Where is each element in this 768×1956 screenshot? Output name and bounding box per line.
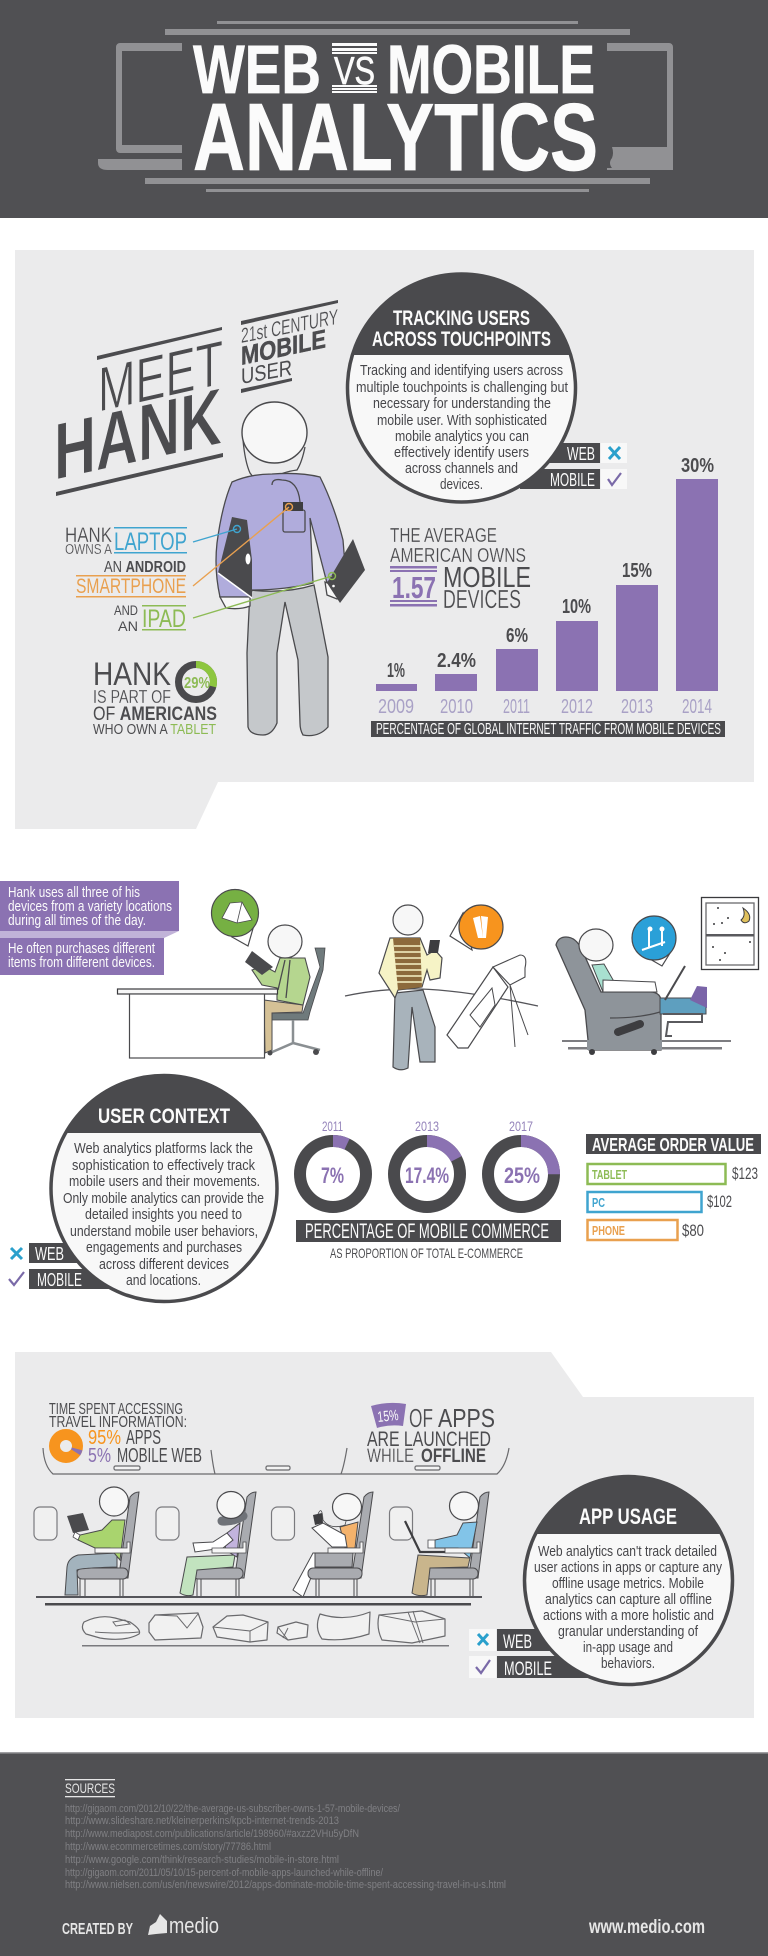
callout: app usage: in-app usage and	[583, 1639, 673, 1656]
icon: night window	[702, 898, 758, 970]
chart: 29% donut: 29%	[184, 675, 210, 692]
text: hank tablet statistic: WHO OWN A TABLET	[93, 721, 216, 738]
callout: tracking users across touchpoints: devices.	[440, 476, 483, 493]
panel: purple location notes	[0, 881, 179, 975]
text: 15% of apps launched offline	[367, 1403, 495, 1467]
text: an android smartphone: SMARTPHONE	[76, 575, 186, 598]
web and mobile tags: MOBILE	[550, 470, 595, 490]
bar chart: global internet traffic from mobile devices: 2011	[503, 696, 530, 718]
illustration: hank figure	[216, 402, 365, 736]
panel: purple location notes: during all times of the day.	[8, 912, 146, 929]
callout: user context: detailed insights you need to	[85, 1206, 242, 1223]
chart: average order value: PHONE	[592, 1223, 625, 1238]
text: average american owns 1.57 mobile devices	[390, 525, 531, 614]
text: hank tablet statistic: OF AMERICANS	[93, 704, 217, 725]
text: an android smartphone	[76, 559, 186, 598]
text: average american owns 1.57 mobile devices: THE AVERAGE	[390, 525, 497, 547]
icon: laptop outline behind title	[98, 43, 673, 170]
callout: user context: understand mobile user behaviors,	[70, 1223, 258, 1240]
text: source urls: http://www.google.com/think/research-studies/mobile-in-store.html	[65, 1854, 339, 1866]
icon: medio logo	[148, 1914, 167, 1935]
callout: app usage: Web analytics can't track detailed	[538, 1543, 717, 1560]
text: source urls: http://gigaom.com/2011/05/10/15-percent-of-mobile-apps-launched-while-offline/	[65, 1867, 384, 1879]
chart: average order value: PC	[592, 1195, 605, 1210]
text: time spent accessing travel information: 5%	[88, 1445, 111, 1467]
donut 2017: 2017	[509, 1118, 533, 1134]
text: hank tablet statistic: IS PART OF	[93, 687, 171, 707]
callout: app usage: analytics can capture all offline	[545, 1591, 712, 1608]
web and mobile tags	[520, 443, 627, 490]
airplane windows	[34, 1507, 412, 1540]
passenger 4	[405, 1492, 489, 1597]
callout: user context: and locations.	[126, 1272, 201, 1289]
text: 15% of apps launched offline: APPS	[438, 1403, 495, 1433]
callout: app usage	[524, 1475, 732, 1684]
heading: 21st century mobile user: USER	[241, 355, 292, 389]
callout: user context: sophistication to effectively track	[72, 1157, 255, 1174]
panel: purple location notes: items from different devices.	[8, 954, 155, 971]
luggage in hold	[82, 1611, 445, 1643]
text: hank owns a laptop: HANK	[65, 524, 112, 547]
callout: user context: mobile users and their movements.	[69, 1173, 260, 1190]
heading: meet hank	[54, 326, 223, 498]
chart: percentage of mobile commerce donuts: AS PROPORTION OF TOTAL E-COMMERCE	[330, 1245, 523, 1261]
callout: app usage: APP USAGE	[579, 1504, 677, 1529]
text: time spent accessing travel information: APPS	[126, 1427, 161, 1449]
title: WEB	[193, 31, 321, 108]
credit: created by medio: medio	[169, 1913, 219, 1938]
text: and an ipad: AN	[118, 618, 138, 634]
bar chart: global internet traffic from mobile devices: 1%	[387, 660, 405, 682]
callout: tracking users across touchpoints: ACROSS TOUCHPOINTS	[372, 328, 551, 351]
callout: tracking users across touchpoints: effectively identify users	[394, 444, 529, 461]
chart: average order value	[586, 1134, 761, 1240]
link text: www.medio.com: www.medio.com	[588, 1917, 705, 1938]
airplane ceiling	[43, 1448, 509, 1474]
panel: meet hank	[15, 250, 754, 829]
donut 2011: 7%	[321, 1163, 344, 1188]
text: 15% of apps launched offline: 15%	[377, 1407, 399, 1426]
callout: app usage: offline usage metrics. Mobile	[552, 1575, 704, 1592]
text: 15% of apps launched offline: WHILE	[367, 1446, 414, 1467]
title: MOBILE	[387, 31, 595, 108]
text: average american owns 1.57 mobile devices: DEVICES	[443, 584, 521, 614]
bar chart: global internet traffic from mobile devices	[371, 455, 725, 738]
text: time spent accessing travel information: TRAVEL INFORMATION:	[49, 1414, 187, 1431]
text: hank owns a laptop: LAPTOP	[114, 528, 187, 556]
header banner	[0, 0, 768, 218]
text: hank tablet statistic	[93, 656, 217, 738]
web and mobile tags: user context	[9, 1243, 119, 1290]
text: average american owns 1.57 mobile devices: AMERICAN OWNS	[390, 545, 526, 567]
credit: created by medio: CREATED BY	[62, 1921, 133, 1938]
donut 2013: 2013	[415, 1118, 439, 1134]
web and mobile tags: user context: WEB	[35, 1244, 64, 1264]
chart: 95% apps donut	[52, 1432, 80, 1460]
callout: user context: across different devices	[99, 1256, 229, 1273]
text: average american owns 1.57 mobile devices: 1.57	[392, 570, 436, 605]
text: time spent accessing travel information	[49, 1401, 202, 1467]
panel: app usage airplane	[15, 1352, 754, 1718]
text: hank tablet statistic: HANK	[93, 656, 171, 692]
text: source urls: http://www.mediapost.com/publications/article/198960/#axzz2VHu5yDfN	[65, 1828, 359, 1840]
web and mobile tags: WEB	[567, 444, 595, 464]
callout: tracking users across touchpoints: TRACKING USERS	[393, 307, 530, 330]
chart: average order value: $102	[707, 1192, 732, 1211]
text: time spent accessing travel information: 95%	[88, 1427, 121, 1449]
text: and an ipad	[114, 602, 186, 634]
heading: meet hank: MEET	[98, 326, 223, 426]
text: time spent accessing travel information: TIME SPENT ACCESSING	[49, 1401, 183, 1418]
heading: 21st century mobile user: MOBILE	[241, 323, 326, 371]
donut 2017	[488, 1118, 554, 1207]
illustration: hank in recliner	[556, 898, 758, 1055]
bar chart: global internet traffic from mobile devices: 10%	[562, 596, 591, 618]
text: and an ipad: AND	[114, 602, 138, 618]
chart: percentage of mobile commerce donuts: PERCENTAGE OF MOBILE COMMERCE	[305, 1220, 549, 1243]
text: 15% of apps launched offline: OF	[409, 1403, 433, 1433]
chart: average order value: TABLET	[592, 1167, 627, 1182]
donut 2011: 2011	[322, 1118, 343, 1134]
text: source urls: http://www.nielsen.com/us/en/newswire/2012/apps-dominate-mobile-time-spent-accessing-travel-in-u-s.html	[65, 1879, 506, 1891]
donut 2011	[300, 1118, 366, 1207]
chart: average order value: $80	[682, 1221, 704, 1240]
passenger 3	[293, 1492, 373, 1597]
bar chart: global internet traffic from mobile devices: 2.4%	[437, 650, 476, 672]
bar chart: global internet traffic from mobile devices: 2009	[378, 696, 414, 718]
text: time spent accessing travel information: MOBILE WEB	[117, 1445, 202, 1467]
footer	[0, 1752, 768, 1956]
callout lines	[193, 504, 336, 618]
callout: user context: engagements and purchases	[86, 1239, 242, 1256]
title	[193, 31, 598, 191]
heading: meet hank: HANK	[54, 372, 222, 498]
web and mobile tags: app usage	[469, 1629, 592, 1680]
bar chart: global internet traffic from mobile devices: 6%	[506, 625, 528, 647]
callout: tracking users across touchpoints: necessary for understanding the	[373, 395, 551, 412]
web and mobile tags: app usage: MOBILE	[504, 1659, 552, 1680]
panel: purple location notes: He often purchases different	[8, 940, 156, 957]
passenger 1	[65, 1487, 139, 1597]
illustration: hank at desk	[118, 890, 325, 1058]
text: 15% of apps launched offline: ARE LAUNCHED	[367, 1428, 491, 1451]
text: source urls: http://gigaom.com/2012/10/22/the-average-us-subscriber-owns-1-57-mobile-devices/	[65, 1803, 401, 1815]
bar chart: global internet traffic from mobile devices: 2012	[561, 696, 593, 718]
illustration: hank on golf course	[345, 905, 538, 1070]
panel: purple location notes: Hank uses all three of his	[8, 884, 140, 901]
web and mobile tags: app usage: WEB	[503, 1632, 532, 1653]
text: an android smartphone: AN ANDROID	[104, 559, 186, 576]
callout: app usage: user actions in apps or capture any	[534, 1559, 722, 1576]
donut 2017: 25%	[504, 1163, 540, 1188]
callout: tracking users across touchpoints: mobile analytics you can	[395, 428, 529, 445]
title: ANALYTICS	[193, 84, 598, 191]
bar chart: global internet traffic from mobile devices: 2013	[621, 696, 653, 718]
credit: created by medio	[62, 1913, 219, 1938]
text: and an ipad: IPAD	[142, 605, 186, 633]
callout: user context	[51, 1074, 277, 1302]
icon: green tent bubble	[212, 890, 258, 946]
passenger 2	[180, 1492, 256, 1597]
heading: 21st century mobile user: 21st CENTURY	[241, 306, 338, 348]
icon: orange ticket bubble	[450, 905, 503, 950]
bar chart: global internet traffic from mobile devices: 2010	[440, 696, 473, 718]
callout: user context: USER CONTEXT	[98, 1105, 230, 1128]
bar chart: global internet traffic from mobile devices: 2014	[682, 696, 712, 718]
heading: sources	[65, 1779, 115, 1797]
text: hank owns a laptop: OWNS A	[65, 541, 112, 558]
callout: app usage: behaviors.	[601, 1655, 655, 1672]
panel: purple location notes: devices from a variety locations	[8, 898, 172, 915]
callout: tracking users across touchpoints: across channels and	[405, 460, 518, 477]
text: hank owns a laptop	[65, 524, 187, 558]
bar chart: global internet traffic from mobile devices: 30%	[681, 455, 714, 477]
text: 15% of apps launched offline: OFFLINE	[421, 1446, 486, 1467]
callout: app usage: actions with a more holistic and	[543, 1607, 714, 1624]
donut 2013: 17.4%	[405, 1163, 449, 1188]
heading: 21st century mobile user	[241, 300, 338, 393]
text: source urls: http://www.ecommercetimes.com/story/77786.html	[65, 1841, 271, 1853]
bar chart: global internet traffic from mobile devices: 15%	[622, 560, 652, 582]
text: average american owns 1.57 mobile devices: MOBILE	[443, 562, 531, 594]
donut 2013	[394, 1118, 460, 1207]
text: source urls	[65, 1803, 506, 1891]
callout: tracking users across touchpoints: multiple touchpoints is challenging but	[356, 379, 569, 396]
callout: app usage: granular understanding of	[558, 1623, 699, 1640]
callout: tracking users across touchpoints: mobile user. With sophisticated	[377, 412, 547, 429]
web and mobile tags: user context: MOBILE	[37, 1270, 82, 1290]
callout: user context: Only mobile analytics can provide the	[63, 1190, 264, 1207]
callout: tracking users across touchpoints	[348, 273, 576, 502]
callout: user context: Web analytics platforms lack the	[74, 1140, 253, 1157]
heading: sources: SOURCES	[65, 1780, 115, 1796]
title: VS	[334, 50, 375, 93]
icon: blue gym bubble	[632, 916, 676, 966]
text: source urls: http://www.slideshare.net/kleinerperkins/kpcb-internet-trends-2013	[65, 1815, 339, 1827]
cabin floor	[36, 1596, 482, 1646]
chart: percentage of mobile commerce donuts	[296, 1118, 561, 1261]
callout: tracking users across touchpoints: Tracking and identifying users across	[360, 362, 563, 379]
